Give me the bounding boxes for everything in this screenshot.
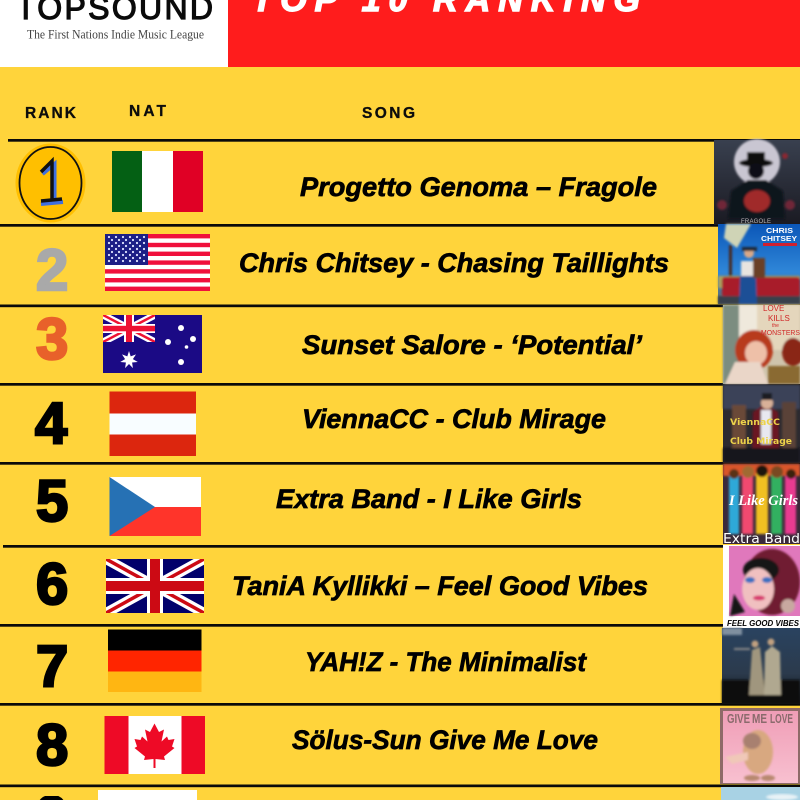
flag: United Kingdom — [106, 559, 204, 613]
nationality header: NAT — [129, 103, 167, 120]
album text: LOVE — [763, 304, 784, 313]
flag: Australia — [103, 315, 202, 373]
flag: Czech Republic — [110, 477, 201, 536]
rank 2 number: 2 — [36, 238, 68, 303]
rank 1 badge — [16, 144, 86, 222]
album text: CHITSEY — [761, 234, 797, 243]
album art: I Like Girls — [723, 464, 800, 547]
album text: FEEL GOOD VIBES — [727, 619, 800, 628]
logo tagline: The First Nations Indie Music League — [27, 28, 204, 42]
album text: ME — [752, 711, 767, 726]
song title: rank 1: Progetto Genoma – Fragole — [300, 172, 657, 202]
flag: Germany — [108, 630, 202, 692]
song title: rank 5: Extra Band - I Like Girls — [276, 484, 582, 514]
album art: Club Mirage — [723, 385, 800, 463]
song title: rank 7: YAH!Z - The Minimalist — [305, 647, 587, 677]
flag: Canada — [104, 716, 205, 774]
album art: Potential — [723, 304, 800, 384]
album art: Fragole — [714, 139, 800, 225]
song title: rank 4: ViennaCC - Club Mirage — [302, 404, 606, 434]
album art: Give Me Love — [720, 708, 800, 784]
rank 7 number: 7 — [36, 634, 68, 699]
flag: United States — [105, 234, 210, 291]
album text: ViennaCC — [730, 418, 780, 428]
rank 4 number: 4 — [35, 391, 67, 456]
album text: Club Mirage — [730, 437, 792, 447]
album text: KILLS — [768, 314, 790, 323]
album text: the — [772, 323, 779, 329]
title banner — [228, 0, 800, 67]
album text: I Like Girls — [728, 493, 798, 509]
album text: GIVE — [727, 711, 750, 726]
flag: partial row nine — [98, 790, 197, 800]
song header: SONG — [362, 105, 415, 122]
album text: FRAGOLE — [741, 219, 771, 225]
song title: rank 8: Sölus-Sun Give Me Love — [292, 725, 598, 755]
song title: rank 6: TaniA Kyllikki – Feel Good Vibes — [232, 571, 648, 601]
album art: The Minimalist — [722, 628, 800, 704]
album art: Chasing Taillights — [718, 224, 800, 304]
flag: Austria — [110, 392, 196, 456]
album text: CHRIS — [766, 226, 793, 235]
logo panel — [0, 0, 228, 67]
song title: rank 3: Sunset Salore - ‘Potential’ — [302, 330, 643, 360]
album art: Feel Good Vibes — [723, 545, 800, 628]
rank 5 number: 5 — [36, 469, 68, 534]
rank header: RANK — [25, 105, 77, 122]
album text: Extra Band — [723, 531, 800, 547]
column headers — [25, 103, 415, 122]
rank 8 number: 8 — [36, 713, 68, 778]
album art: partial row nine — [721, 787, 800, 800]
flag: Italy — [112, 151, 203, 212]
song title: rank 2: Chris Chitsey - Chasing Taillights — [239, 248, 669, 278]
rank 6 number: 6 — [36, 552, 68, 617]
rank 3 number: 3 — [36, 307, 68, 372]
